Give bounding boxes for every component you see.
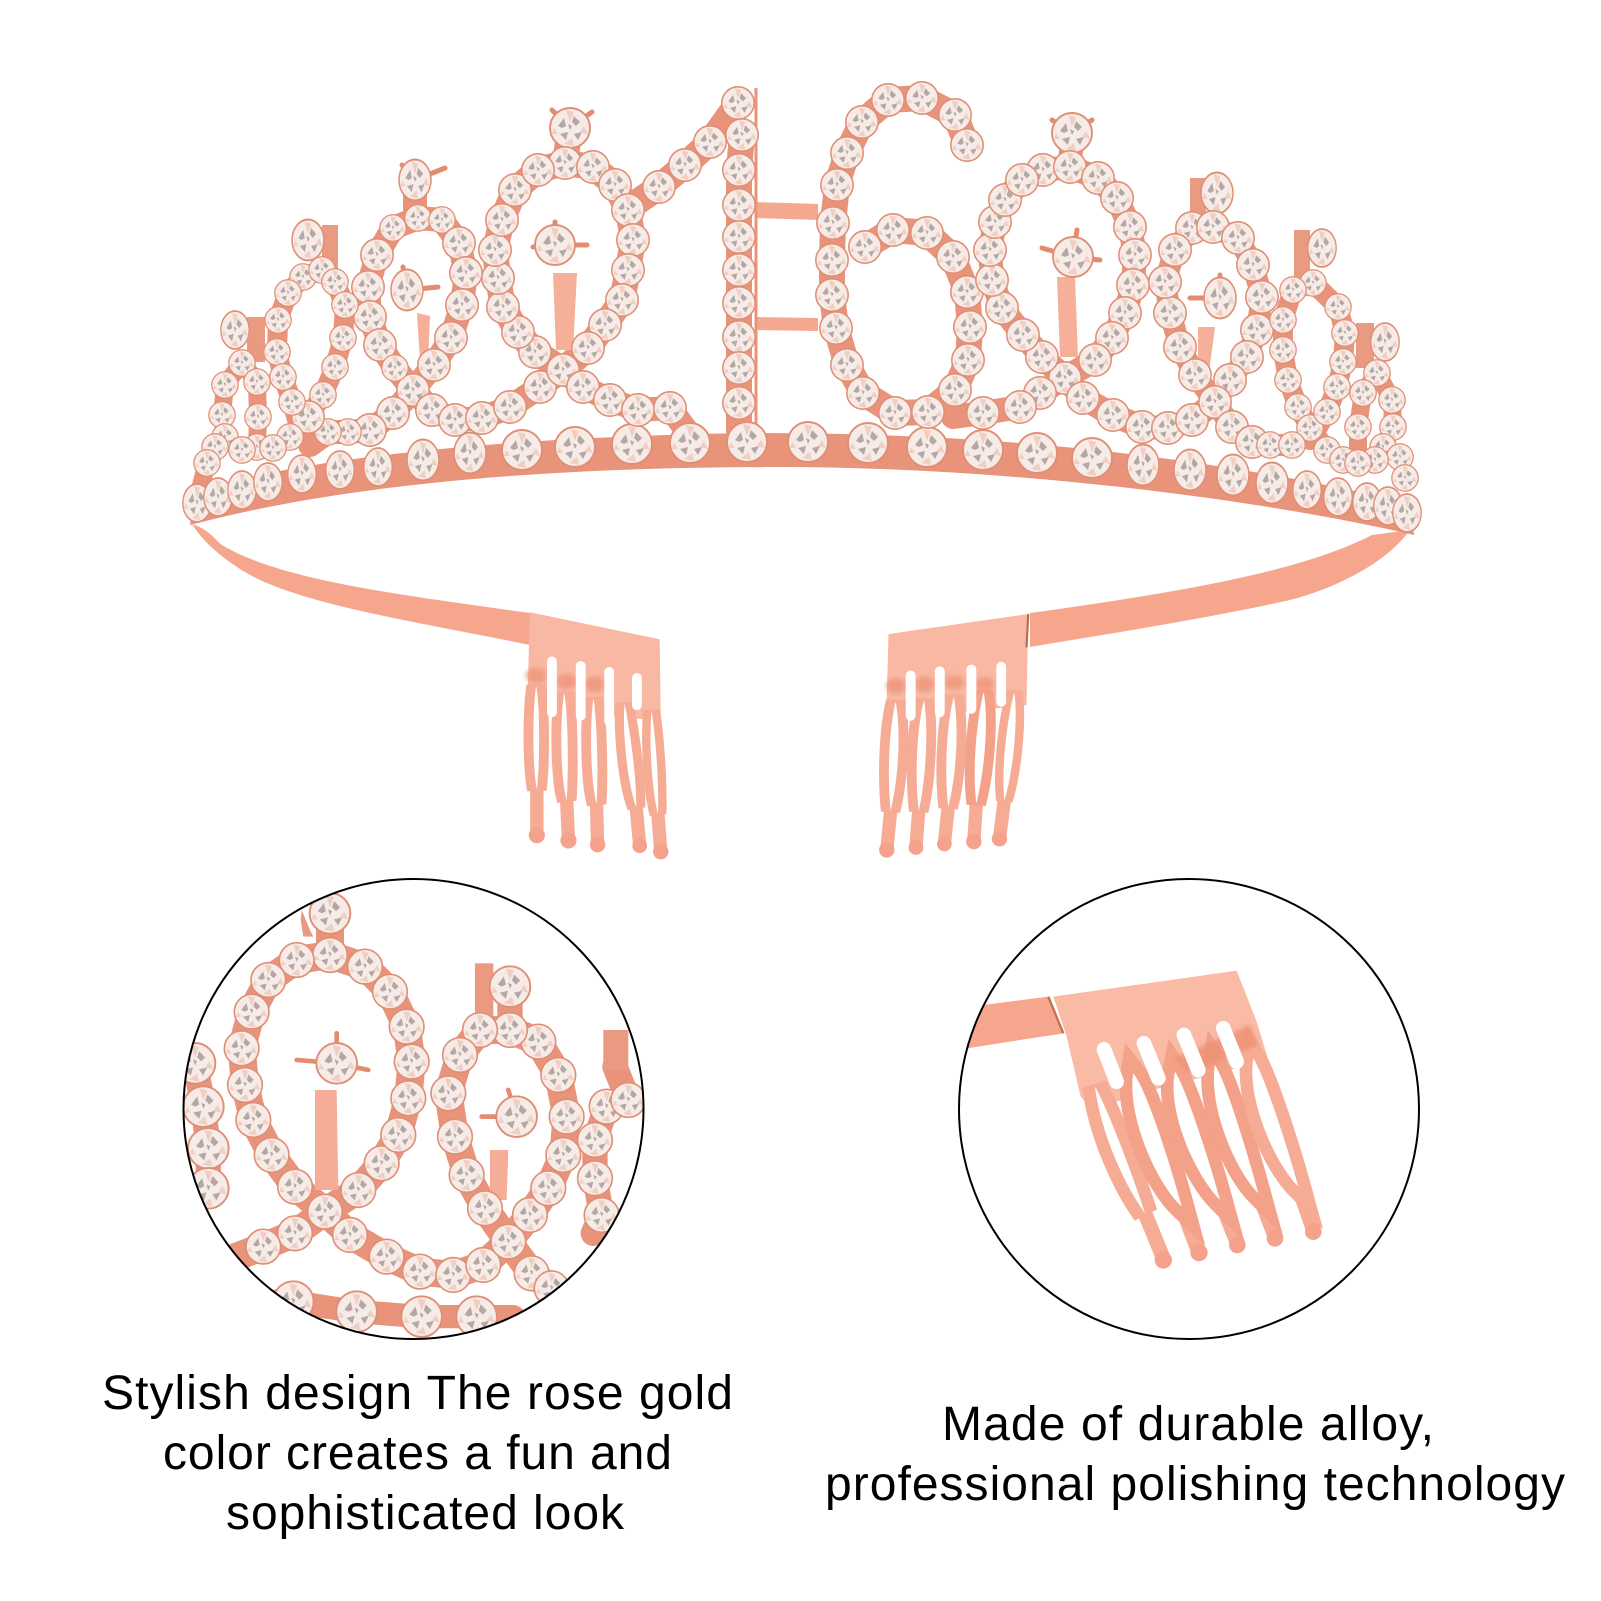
centre-left loop and digit 1 rhinestones	[479, 87, 758, 426]
caption: durable alloy: professional polishing technology	[825, 1458, 1565, 1511]
close-up band	[960, 997, 1063, 1050]
close-up metal frame	[195, 913, 628, 1317]
connector bars between 1 and 6	[755, 202, 818, 331]
stone prongs	[402, 110, 1220, 298]
digit 6 rhinestones	[816, 82, 986, 429]
top stone mounts	[247, 178, 1374, 368]
headband left arm	[192, 524, 530, 645]
left swirl rhinestones	[194, 160, 556, 476]
close-up comb plate	[1053, 971, 1268, 1110]
close-up comb teeth	[1095, 1025, 1322, 1269]
close-up stems	[315, 1090, 508, 1200]
circle panel: comb close-up	[959, 879, 1419, 1339]
band rhinestones	[183, 422, 1421, 532]
crown metal frame	[197, 98, 1405, 500]
caption: stylish design: sophisticated look	[226, 1487, 625, 1540]
caption: stylish design	[102, 1367, 733, 1540]
headband right arm	[1030, 530, 1410, 647]
close-up mounts and prongs	[301, 910, 628, 1070]
left comb	[526, 612, 668, 859]
upright stems of inner stones	[417, 273, 1215, 380]
caption: stylish design: Stylish design The rose gold	[102, 1367, 733, 1420]
caption: durable alloy	[825, 1398, 1565, 1511]
caption: durable alloy: Made of durable alloy,	[942, 1398, 1434, 1451]
crown base metal	[190, 433, 1414, 535]
caption: stylish design: color creates a fun and	[163, 1427, 672, 1480]
close-up rhinestones	[175, 893, 646, 1337]
right swirl rhinestones	[967, 113, 1418, 491]
tiara product photo	[183, 82, 1421, 859]
right comb	[879, 614, 1028, 858]
digit 1 edge rim	[754, 88, 758, 425]
circle panel: rhinestone close-up	[175, 879, 646, 1339]
